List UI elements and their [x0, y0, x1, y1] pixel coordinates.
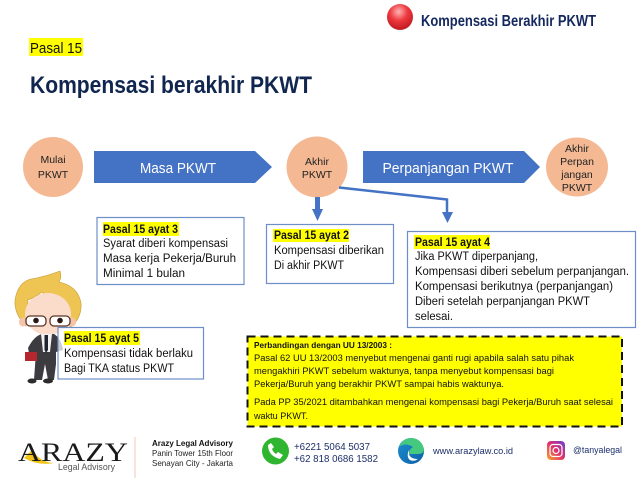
panel: Pasal 15 ayat 5 — [58, 328, 204, 379]
callout: comparison with UU 13/2003 — [248, 336, 622, 426]
panel: Pasal 15 ayat 3: Minimal 1 bulan — [103, 268, 185, 280]
arrow: down to ayat 2 — [312, 197, 323, 221]
panel: Pasal 15 ayat 4: Pasal 15 ayat 4 — [415, 237, 491, 249]
icon: red ball — [387, 4, 413, 30]
timeline flow — [23, 136, 608, 223]
panel: Pasal 15 ayat 5: Bagi TKA status PKWT — [64, 363, 174, 375]
illustration: blond lawyer character — [15, 271, 81, 384]
panel: Pasal 15 ayat 5: Kompensasi tidak berlaku — [64, 348, 193, 360]
website: www.arazylaw.co.id — [432, 446, 513, 456]
panel: Pasal 15 ayat 3: Pasal 15 ayat 3 — [103, 224, 178, 236]
callout: comparison with UU 13/2003: Pekerja/Buruh yang berakhir PKWT sampai habis waktunya. — [254, 379, 504, 389]
circle: Akhir Perpanjangan PKWT — [546, 138, 608, 196]
logo: Arazy Legal Advisory — [18, 437, 136, 478]
panel: Pasal 15 ayat 4: selesai. — [415, 311, 453, 323]
circle: Akhir Perpanjangan PKWT: jangan — [560, 169, 593, 181]
panel: Pasal 15 ayat 3: Masa kerja Pekerja/Buruh — [103, 253, 236, 265]
circle: Mulai PKWT: PKWT — [38, 169, 69, 181]
callout: comparison with UU 13/2003: Pada PP 35/2021 ditambahkan mengenai kompensasi bagi Pekerja/Buruh saat selesai — [254, 397, 613, 407]
callout: comparison with UU 13/2003: waktu PKWT. — [253, 411, 308, 421]
callout: comparison with UU 13/2003: mengakhiri PKWT sebelum waktunya, tanpa menyebut kompensasi bagi — [254, 366, 554, 376]
circle: Mulai PKWT — [23, 137, 83, 197]
icon: Instagram — [547, 441, 565, 460]
panel: Pasal 15 ayat 4: Diberi setelah perpanjangan PKWT — [415, 296, 590, 308]
circle: Akhir PKWT: PKWT — [302, 169, 333, 181]
circle: Akhir PKWT: Akhir — [305, 156, 329, 168]
footer — [18, 437, 622, 478]
main title: Kompensasi berakhir PKWT — [30, 72, 312, 99]
arrow: elbow to ayat 4 — [339, 188, 453, 223]
icon: web browser — [398, 438, 424, 464]
arrow: Masa PKWT: Masa PKWT — [140, 160, 216, 177]
circle: Akhir Perpanjangan PKWT: Perpan — [560, 156, 594, 168]
panel: Pasal 15 ayat 4: Kompensasi berikutnya (perpanjangan) — [415, 281, 613, 293]
phone numbers: +62 818 0686 1582 — [294, 454, 378, 465]
icon: phone — [262, 438, 289, 464]
panel: Pasal 15 ayat 4: Kompensasi diberi sebelum perpanjangan. — [415, 266, 629, 278]
circle: Akhir Perpanjangan PKWT: Akhir — [565, 143, 589, 155]
Instagram handle: @tanyalegal — [573, 445, 622, 455]
phone numbers — [294, 442, 378, 465]
panel: Pasal 15 ayat 4: Jika PKWT diperpanjang, — [415, 251, 538, 263]
callout: comparison with UU 13/2003: Pasal 62 UU 13/2003 menyebut mengenai ganti rugi apabila salah satu pihak — [254, 353, 575, 363]
panel: Pasal 15 ayat 4 — [408, 232, 636, 328]
company address — [152, 438, 233, 468]
panel: Pasal 15 ayat 3 — [97, 218, 244, 284]
company address: Panin Tower 15th Floor — [152, 448, 233, 458]
arrow: Masa PKWT — [94, 151, 272, 183]
company address: Senayan City - Jakarta — [152, 458, 233, 468]
company address: Arazy Legal Advisory — [152, 438, 233, 448]
logo: Arazy Legal Advisory: ARAZY — [18, 438, 128, 467]
header title: Kompensasi Berakhir PKWT — [421, 13, 596, 30]
arrow: Perpanjangan PKWT — [363, 151, 540, 183]
circle: Akhir Perpanjangan PKWT: PKWT — [562, 182, 593, 194]
arrow: Perpanjangan PKWT: Perpanjangan PKWT — [382, 160, 514, 177]
panel: Pasal 15 ayat 2: Di akhir PKWT — [274, 260, 344, 272]
panel: Pasal 15 ayat 5: Pasal 15 ayat 5 — [64, 333, 140, 345]
logo: Arazy Legal Advisory: Legal Advisory — [58, 462, 115, 473]
panel: Pasal 15 ayat 2: Kompensasi diberikan — [274, 245, 384, 257]
circle: Akhir PKWT — [286, 136, 348, 198]
panel: Pasal 15 ayat 2 — [266, 224, 394, 284]
phone numbers: +6221 5064 5037 — [294, 442, 370, 453]
article label: Pasal 15: Pasal 15 — [30, 40, 82, 57]
circle: Mulai PKWT: Mulai — [40, 154, 66, 166]
panel: Pasal 15 ayat 3: Syarat diberi kompensasi — [103, 238, 228, 250]
header badge: Kompensasi Berakhir PKWT — [387, 4, 596, 30]
callout: comparison with UU 13/2003: Perbandingan dengan UU 13/2003 : — [254, 340, 392, 350]
panel: Pasal 15 ayat 2: Pasal 15 ayat 2 — [274, 230, 349, 242]
